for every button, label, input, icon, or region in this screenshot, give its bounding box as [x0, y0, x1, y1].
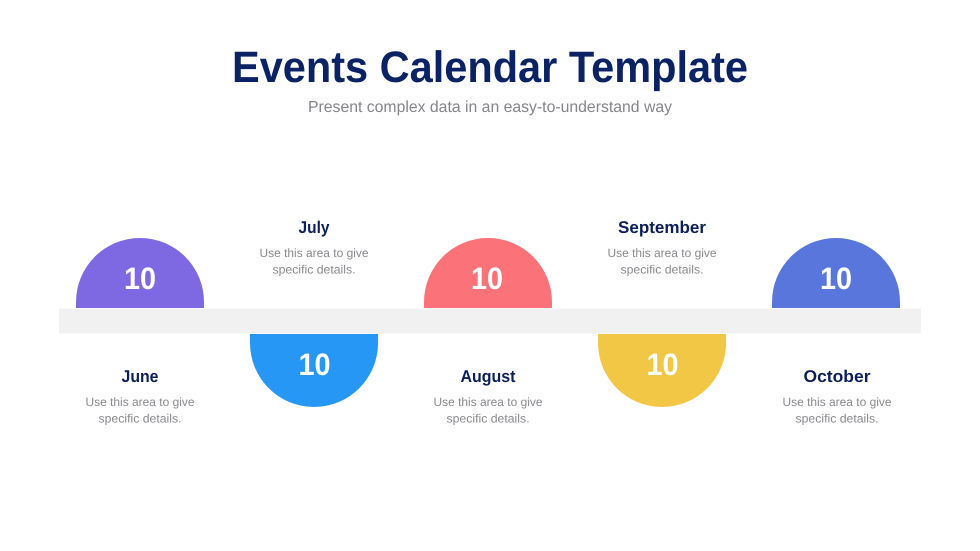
timeline band: [59, 308, 921, 334]
details: June: Use this area to give: [86, 395, 195, 409]
details: October: Use this area to give: [782, 395, 892, 409]
heading: June: June: [122, 367, 158, 386]
date number: August: 10: [471, 261, 503, 296]
event: June: [76, 238, 204, 426]
date number: July: 10: [298, 347, 330, 382]
date number: September: 10: [646, 347, 678, 382]
heading: October: October: [804, 367, 871, 386]
details: September: specific details.: [620, 262, 704, 276]
event: July: [250, 218, 378, 407]
details: July: Use this area to give: [260, 246, 369, 260]
details: August: Use this area to give: [434, 395, 543, 409]
details: July: specific details.: [272, 262, 356, 276]
icon: indigo semicircle: [772, 238, 900, 308]
details: October: specific details.: [796, 412, 878, 426]
title: Events Calendar Template: [232, 43, 748, 92]
event: October: [772, 238, 900, 426]
icon: coral semicircle: [424, 238, 552, 308]
details: June: specific details.: [98, 412, 182, 426]
heading: August: August: [460, 367, 516, 386]
details: August: specific details.: [446, 412, 530, 426]
date number: October: 10: [820, 261, 852, 296]
icon: yellow semicircle: [598, 334, 726, 407]
details: September: Use this area to give: [608, 246, 717, 260]
icon: purple semicircle: [76, 238, 204, 308]
subtitle: Present complex data in an easy-to-understand way: [308, 99, 672, 116]
heading: July: July: [298, 218, 330, 237]
date number: June: 10: [124, 261, 156, 296]
icon: blue semicircle: [250, 334, 378, 407]
event: August: [424, 238, 552, 426]
heading: September: September: [618, 218, 706, 237]
event: September: [598, 218, 726, 407]
